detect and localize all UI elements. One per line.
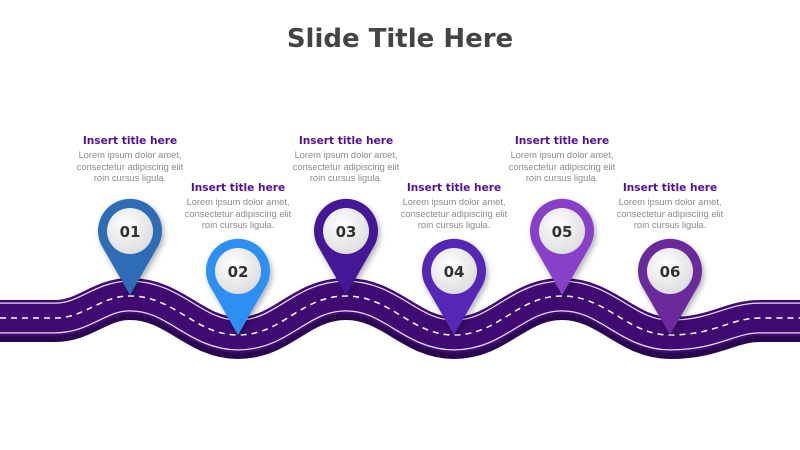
text 06 bbox=[617, 182, 724, 230]
text 04: Insert title here bbox=[407, 182, 501, 194]
text 01: roin cursus ligula. bbox=[94, 173, 166, 183]
text 03: Insert title here bbox=[299, 135, 393, 147]
text 06: Lorem ipsum dolor amet, bbox=[619, 197, 721, 207]
text 03: consectetur adipiscing elit bbox=[293, 162, 399, 172]
text 04 bbox=[401, 182, 508, 230]
text 02: Insert title here bbox=[191, 182, 285, 194]
pin 03 bbox=[314, 199, 378, 295]
text 01: Lorem ipsum dolor amet, bbox=[79, 150, 181, 160]
pin 05 bbox=[530, 199, 594, 295]
text 06: Insert title here bbox=[623, 182, 717, 194]
text 04: consectetur adipiscing elit bbox=[401, 208, 507, 218]
text 05 bbox=[509, 135, 616, 183]
text 02 bbox=[185, 182, 292, 230]
title: Slide Title Here bbox=[287, 24, 513, 54]
text 05: Lorem ipsum dolor amet, bbox=[511, 150, 613, 160]
text 02: Lorem ipsum dolor amet, bbox=[187, 197, 289, 207]
pin 06 bbox=[638, 239, 702, 335]
pin 03: 03 bbox=[336, 223, 356, 241]
text 01 bbox=[77, 135, 184, 183]
text 05: consectetur adipiscing elit bbox=[509, 162, 615, 172]
road bbox=[0, 296, 800, 341]
text 04: roin cursus ligula. bbox=[418, 220, 490, 230]
text 02: consectetur adipiscing elit bbox=[185, 208, 291, 218]
pin 02: 02 bbox=[228, 263, 248, 281]
pin 05: 05 bbox=[552, 223, 572, 241]
pin 02 bbox=[206, 239, 270, 335]
text 04: Lorem ipsum dolor amet, bbox=[403, 197, 505, 207]
pin 01 bbox=[98, 199, 162, 295]
text 03 bbox=[293, 135, 400, 183]
text 02: roin cursus ligula. bbox=[202, 220, 274, 230]
text 03: roin cursus ligula. bbox=[310, 173, 382, 183]
pin 04 bbox=[422, 239, 486, 335]
text 06: consectetur adipiscing elit bbox=[617, 208, 723, 218]
text 03: Lorem ipsum dolor amet, bbox=[295, 150, 397, 160]
text 05: roin cursus ligula. bbox=[526, 173, 598, 183]
text 06: roin cursus ligula. bbox=[634, 220, 706, 230]
pin 04: 04 bbox=[444, 263, 464, 281]
pin 06: 06 bbox=[660, 263, 680, 281]
text 01: Insert title here bbox=[83, 135, 177, 147]
text 01: consectetur adipiscing elit bbox=[77, 162, 183, 172]
text 05: Insert title here bbox=[515, 135, 609, 147]
pin 01: 01 bbox=[120, 223, 140, 241]
